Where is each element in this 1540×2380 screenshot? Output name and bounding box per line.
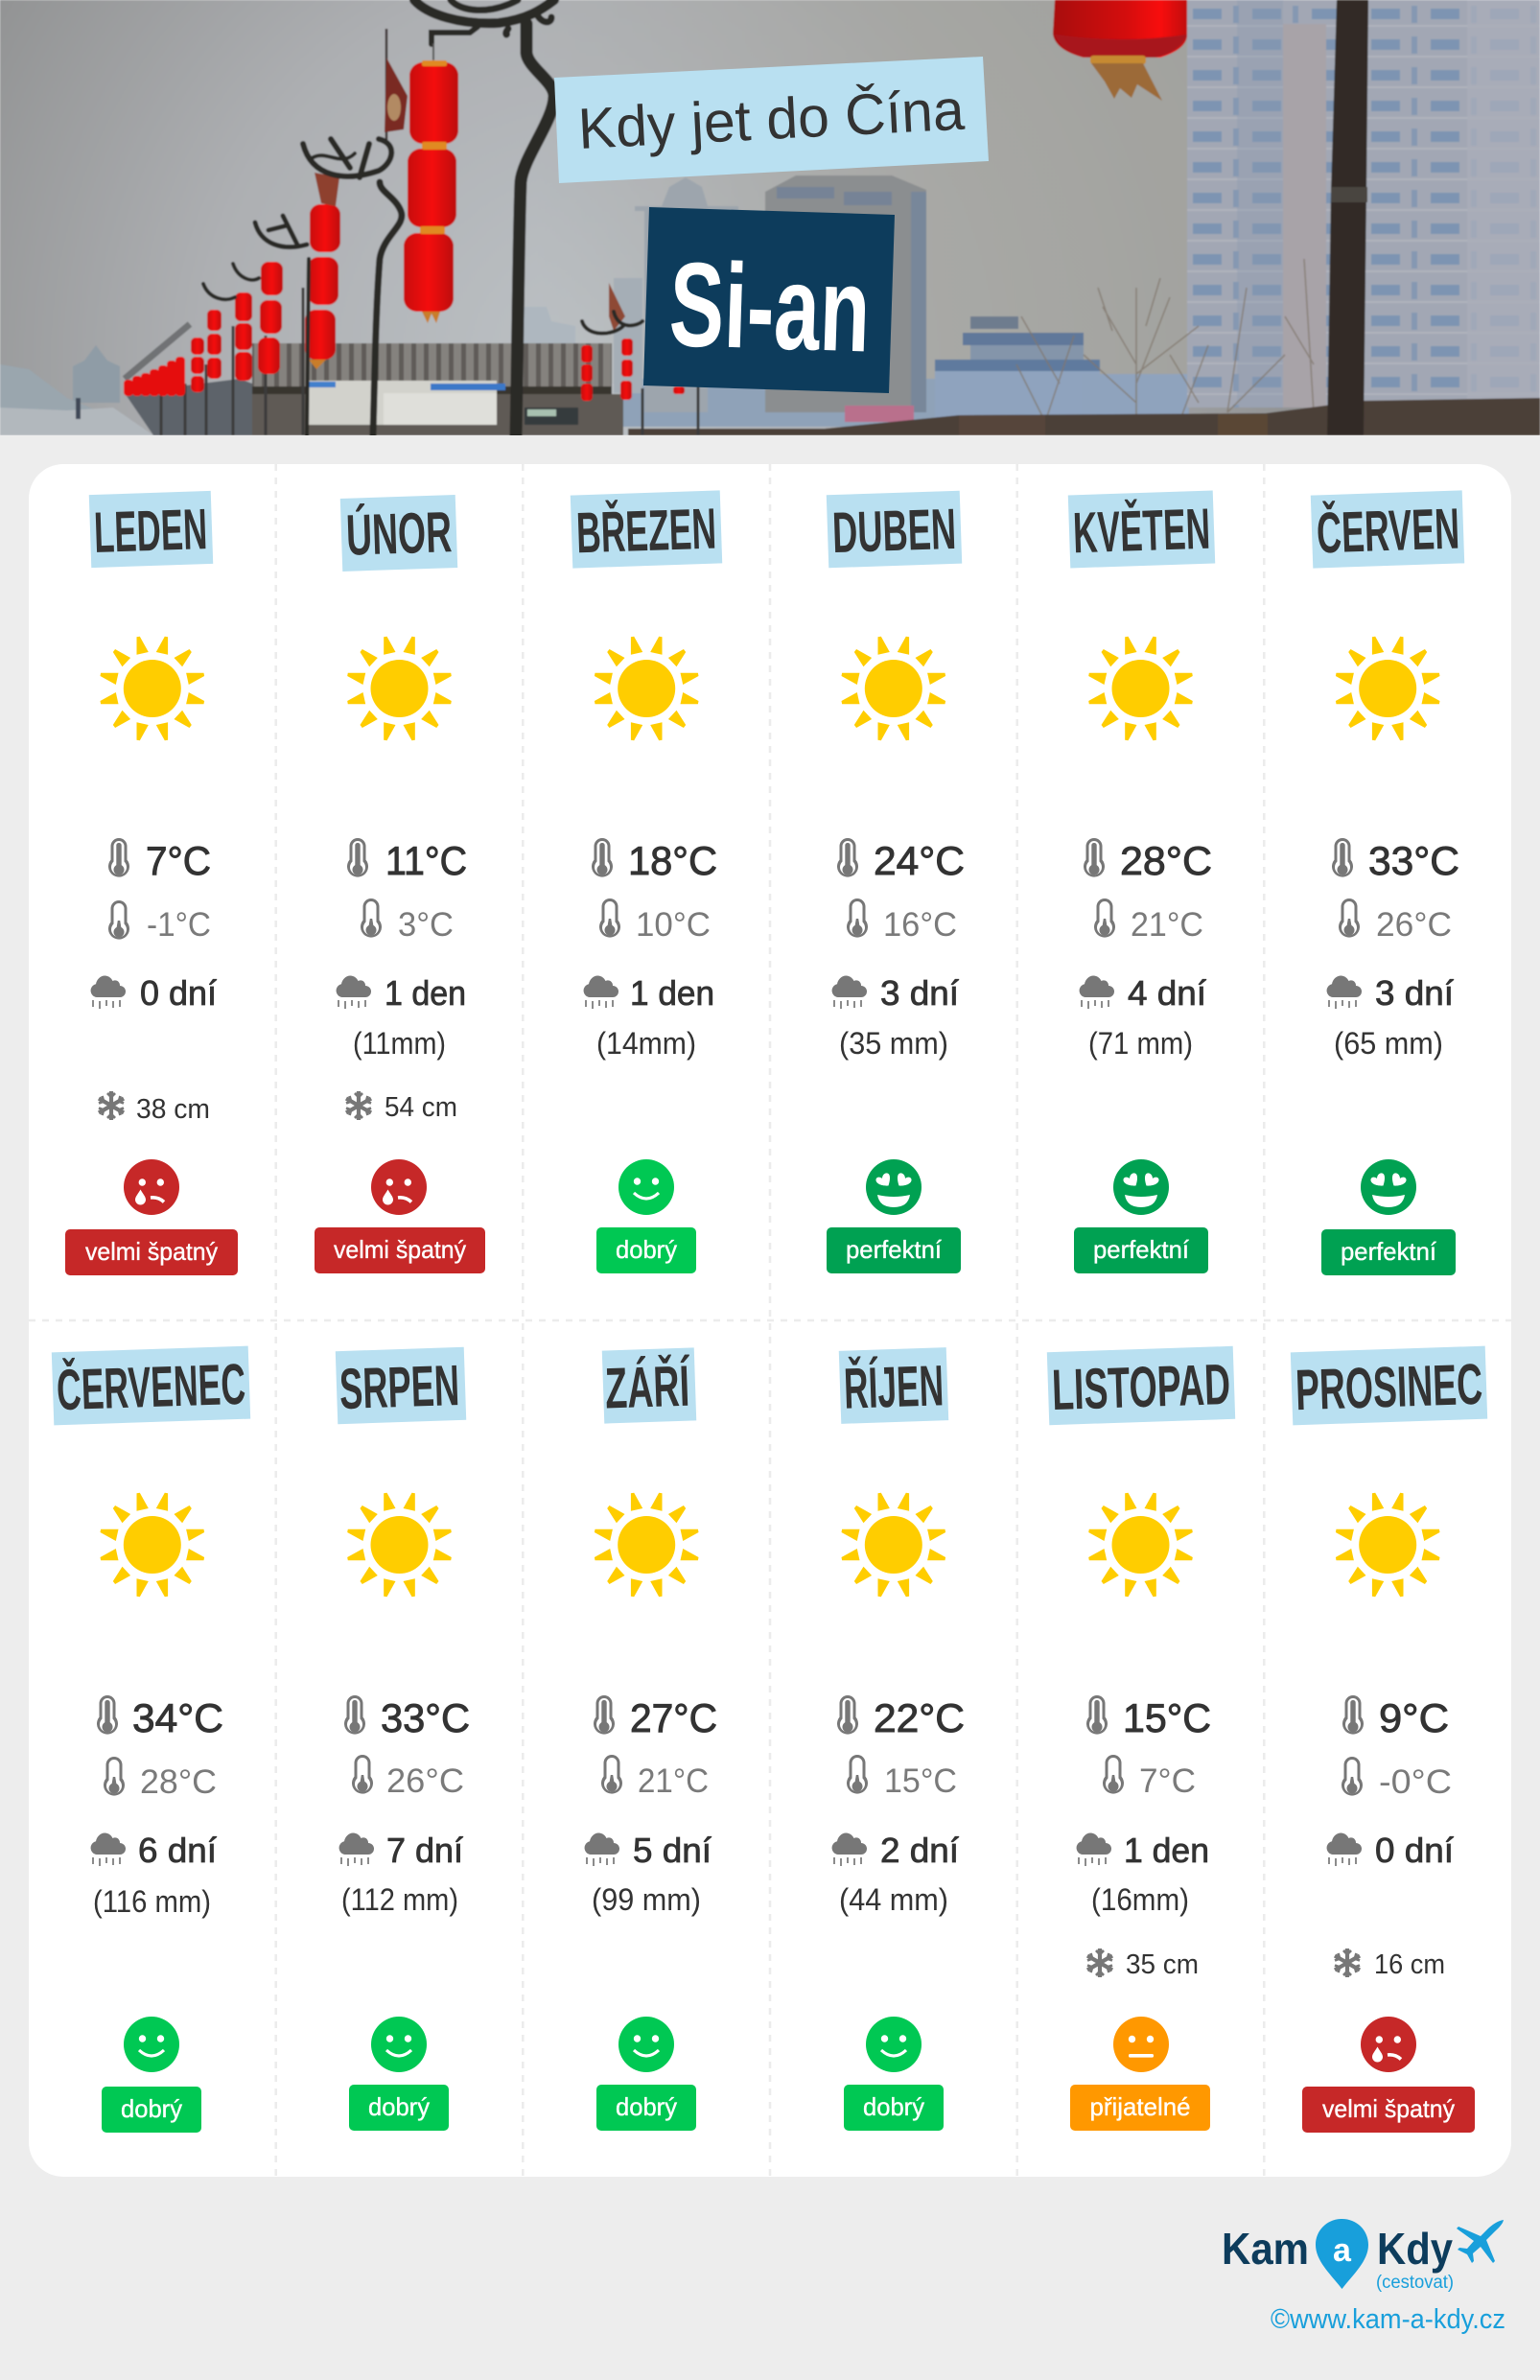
month label [52, 1346, 250, 1425]
month column: BŘEZEN [571, 490, 722, 1273]
month label: KVĚTEN [1072, 497, 1211, 565]
rating smiley [1361, 2017, 1416, 2072]
rating badge [596, 2085, 696, 2131]
snowfall [1087, 1948, 1199, 1980]
snowfall: 54 cm [385, 1092, 457, 1123]
title banner: Kdy jet do Čína [554, 57, 989, 183]
rain days [337, 973, 466, 1013]
icon: sun [347, 1493, 452, 1597]
rain amount: (116 mm) [93, 1884, 211, 1919]
city banner: Si-an: Si-an [667, 238, 872, 378]
month label: BŘEZEN [575, 497, 717, 565]
icon: sun [347, 637, 452, 740]
logo: Kam a Kdy: (cestovat) [1376, 2273, 1454, 2293]
month column: LEDEN [65, 491, 238, 1275]
rating smiley [866, 2017, 922, 2072]
low temperature [1342, 1757, 1452, 1801]
icon: sun [842, 637, 945, 740]
high temperature: 15°C [1123, 1695, 1211, 1740]
rain amount: (44 mm) [839, 1882, 948, 1917]
icon: sun [100, 1493, 204, 1597]
far lanterns [124, 357, 185, 396]
rain days: 1 den [1124, 1831, 1209, 1870]
low temperature: 3°C [398, 906, 454, 944]
snowfall [1335, 1948, 1445, 1980]
rating badge [1070, 2085, 1210, 2131]
low temperature [104, 1757, 217, 1801]
low temperature [847, 1755, 957, 1800]
snowfall: 35 cm [1126, 1949, 1199, 1980]
rain days [585, 1831, 712, 1870]
rating badge [596, 1227, 696, 1273]
rain days: 3 dní [1375, 973, 1454, 1013]
rain days [91, 1831, 217, 1870]
month label [571, 490, 722, 569]
logo: Kam a Kdy [1222, 2219, 1504, 2293]
high temperature: 27°C [630, 1695, 717, 1740]
month label [839, 1347, 948, 1424]
logo: Kam a Kdy: a [1333, 2232, 1352, 2269]
rain amount: (112 mm) [341, 1882, 458, 1917]
rating badge [1302, 2087, 1475, 2133]
low temperature: 21°C [1131, 906, 1203, 944]
snowfall [99, 1091, 210, 1125]
low temperature: 28°C [140, 1763, 217, 1801]
high temperature: 33°C [381, 1695, 470, 1740]
icon: sun [595, 1493, 698, 1597]
icon: sun [1336, 1493, 1440, 1597]
rating badge [1321, 1229, 1456, 1275]
icon: sun [1336, 637, 1440, 740]
low temperature [352, 1755, 464, 1800]
icon: sun [842, 1493, 945, 1597]
month label [336, 1347, 466, 1424]
low temperature [601, 1755, 709, 1800]
rain days: 2 dní [880, 1831, 959, 1870]
icon: sun [1088, 1493, 1193, 1597]
rain amount: (16mm) [1091, 1882, 1189, 1917]
month label [602, 1347, 696, 1424]
low temperature: 26°C [1376, 906, 1452, 944]
rain days [832, 973, 959, 1013]
high temperature [108, 838, 211, 883]
month label [1068, 491, 1215, 568]
rating badge [1074, 1227, 1208, 1273]
rating smiley [1113, 2017, 1169, 2072]
low temperature [599, 898, 711, 944]
rating smiley [124, 1159, 179, 1215]
rain days [1327, 1831, 1454, 1870]
month column: LISTOPAD [1047, 1346, 1235, 2131]
logo: Kam a Kdy: Kdy [1377, 2224, 1453, 2274]
title banner: Kdy jet do Čína: Kdy jet do Čína [576, 78, 967, 161]
low temperature: 7°C [1139, 1762, 1196, 1800]
low temperature: 26°C [386, 1762, 464, 1800]
city banner: Si-an [643, 207, 895, 393]
rating smiley [124, 2017, 179, 2072]
white calendar card [29, 464, 1511, 2177]
rain days: 1 den [385, 973, 466, 1013]
low temperature [108, 900, 211, 944]
high temperature: 11°C [385, 838, 467, 883]
rating badge: dobrý [121, 2094, 182, 2123]
high temperature [1086, 1695, 1211, 1740]
rating badge: perfektní [1093, 1235, 1190, 1264]
low temperature [1103, 1755, 1196, 1800]
rating smiley [371, 2017, 427, 2072]
rain days: 7 dní [386, 1831, 463, 1870]
month column: DUBEN [827, 491, 965, 1273]
rating smiley [866, 1159, 922, 1215]
month label: ČERVENEC [56, 1352, 246, 1422]
month column: ČERVEN [1311, 490, 1464, 1275]
rain amount: (65 mm) [1334, 1026, 1443, 1061]
website credit: ©www.kam-a-kdy.cz [1271, 2304, 1505, 2335]
high temperature [1342, 1695, 1449, 1740]
rating badge: dobrý [616, 1235, 677, 1264]
month label: LEDEN [93, 497, 208, 565]
rain days: 0 dní [140, 973, 217, 1013]
rating badge [349, 2085, 449, 2131]
high temperature: 24°C [874, 838, 965, 883]
snowfall [346, 1091, 457, 1123]
rating badge [827, 1227, 961, 1273]
high temperature: 18°C [628, 838, 717, 883]
month label [1311, 490, 1464, 569]
rating smiley [1361, 1159, 1416, 1215]
high temperature: 28°C [1120, 838, 1212, 883]
icon: sun [595, 637, 698, 740]
month column: PROSINEC [1291, 1346, 1487, 2133]
rain days: 3 dní [880, 973, 959, 1013]
rain days [339, 1831, 463, 1870]
high temperature: 9°C [1379, 1695, 1449, 1740]
month column: ŘÍJEN [832, 1347, 965, 2131]
high temperature [594, 1695, 717, 1740]
low temperature: -0°C [1379, 1763, 1452, 1801]
rain amount: (99 mm) [592, 1882, 701, 1917]
month column: ZÁŘÍ [585, 1347, 717, 2131]
low temperature: 10°C [636, 906, 711, 944]
low temperature: -1°C [147, 906, 211, 944]
rain days [91, 973, 217, 1013]
rain days [1327, 973, 1454, 1013]
snowfall: 16 cm [1374, 1949, 1445, 1980]
month label [340, 495, 457, 572]
rating smiley [618, 1159, 674, 1215]
high temperature: 34°C [132, 1695, 223, 1740]
rating badge: dobrý [368, 2092, 430, 2121]
snowfall: 38 cm [136, 1094, 210, 1125]
month label [1047, 1346, 1235, 1425]
high temperature [347, 838, 467, 883]
rating badge: perfektní [846, 1235, 943, 1264]
rating badge [65, 1229, 238, 1275]
logo: Kam a Kdy: Kam [1222, 2224, 1309, 2274]
month label: SRPEN [338, 1353, 460, 1421]
rating badge: dobrý [863, 2092, 924, 2121]
rating badge: dobrý [616, 2092, 677, 2121]
rating badge [844, 2085, 944, 2131]
rain days [584, 973, 714, 1013]
rain amount: (11mm) [353, 1026, 446, 1061]
high temperature: 7°C [146, 838, 211, 883]
rating smiley [618, 2017, 674, 2072]
month label [89, 491, 213, 568]
icon: sun [100, 637, 204, 740]
rain days: 5 dní [633, 1831, 712, 1870]
rain amount: (71 mm) [1088, 1026, 1193, 1061]
rain days [832, 1831, 959, 1870]
rating badge: perfektní [1341, 1237, 1437, 1266]
month label: ŘÍJEN [843, 1353, 945, 1421]
rain days: 4 dní [1128, 973, 1206, 1013]
month label: DUBEN [831, 497, 957, 565]
rating badge: velmi špatný [85, 1237, 218, 1266]
rating badge: velmi špatný [334, 1235, 466, 1264]
low temperature [1339, 898, 1452, 944]
low temperature: 16°C [883, 906, 957, 944]
month label: ZÁŘÍ [604, 1354, 691, 1421]
month label: ÚNOR [345, 500, 453, 568]
rating smiley [1113, 1159, 1169, 1215]
rain days: 6 dní [138, 1831, 217, 1870]
rating badge: velmi špatný [1322, 2094, 1455, 2123]
rain days: 0 dní [1375, 1831, 1454, 1870]
rating badge [102, 2087, 201, 2133]
low temperature [361, 898, 454, 944]
rain amount: (14mm) [596, 1026, 696, 1061]
header photo: lanterns on the city wall of Xi'an [0, 0, 1540, 435]
month column: KVĚTEN [1068, 491, 1215, 1273]
low temperature: 21°C [638, 1762, 709, 1800]
rating badge: přijatelné [1089, 2092, 1191, 2121]
high temperature: 22°C [874, 1695, 965, 1740]
rain days [1077, 1831, 1209, 1870]
month label: LISTOPAD [1051, 1352, 1231, 1422]
month column: SRPEN [336, 1347, 470, 2131]
rain amount: (35 mm) [839, 1026, 948, 1061]
low temperature [847, 898, 957, 944]
icon: sun [1088, 637, 1193, 740]
rating smiley [371, 1159, 427, 1215]
rating badge [315, 1227, 485, 1273]
low temperature: 15°C [884, 1762, 957, 1800]
high temperature: 33°C [1368, 838, 1459, 883]
month label [827, 491, 962, 568]
rain days: 1 den [630, 973, 714, 1013]
month column: ČERVENEC [52, 1346, 250, 2133]
low temperature [1094, 898, 1203, 944]
month column: ÚNOR [315, 495, 485, 1273]
rain days [1080, 973, 1206, 1013]
